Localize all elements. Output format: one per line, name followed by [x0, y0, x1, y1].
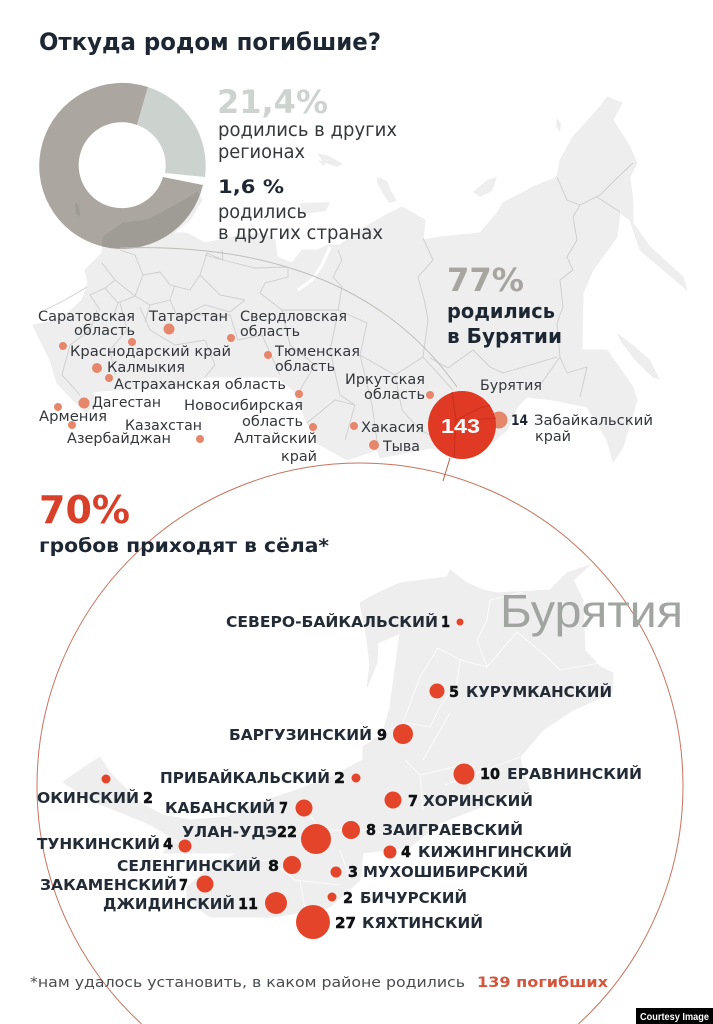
Kyakhtinsky: 27	[335, 914, 356, 932]
Bichursky: БИЧУРСКИЙ	[360, 888, 467, 907]
value 70%: 70%	[39, 488, 130, 532]
Zabaykalsky territory: Забайкальский	[534, 413, 653, 429]
Novosibirsk region: Новосибирская	[184, 398, 303, 414]
stat: 21.4% other regions	[217, 83, 397, 163]
Selenginsky: 8	[268, 857, 279, 875]
Buryatia label: Бурятия	[480, 378, 542, 394]
Kabansky: 7	[279, 799, 288, 817]
Azerbaijan: Азербайджан	[67, 431, 171, 447]
Khakassia: Хакасия	[361, 420, 424, 436]
Okinsky: 2	[143, 789, 153, 807]
Zabaykalsky territory	[490, 412, 653, 445]
credit badge	[636, 1008, 713, 1024]
Armenia: Армения	[39, 409, 107, 425]
caption other regions: регионах	[218, 142, 305, 163]
Dagestan: Дагестан	[92, 395, 161, 411]
value 143: 143	[441, 416, 480, 438]
badge background	[636, 1008, 713, 1024]
bubble circle	[428, 391, 496, 459]
Novosibirsk region	[184, 390, 303, 430]
Buryatia bubble: 143	[428, 391, 496, 459]
Dzhidinsky	[103, 892, 287, 914]
Dzhidinsky: ДЖИДИНСКИЙ	[103, 894, 235, 913]
value 21,4%: 21,4%	[217, 83, 328, 121]
Bichursky: 2	[343, 889, 353, 907]
big circle: zoomed view outline	[37, 463, 683, 1024]
Eravninsky	[454, 764, 642, 784]
Ulan-Ude	[182, 823, 331, 854]
Irkutsk region	[345, 372, 434, 403]
arc: zoom outline from Buryatia on the map	[120, 248, 457, 387]
Barguzinsky: БАРГУЗИНСКИЙ	[229, 725, 372, 744]
Kizhinginsky: 4	[401, 843, 411, 861]
value 1,6 %: 1,6 %	[218, 176, 284, 198]
Ulan-Ude: УЛАН-УДЭ	[182, 823, 277, 841]
Kazakhstan: Казахстан	[125, 418, 202, 434]
Pribaykalsky: ПРИБАЙКАЛЬСКИЙ	[160, 768, 330, 787]
Tatarstan: Татарстан	[148, 309, 228, 325]
caption other countries: в других странах	[218, 223, 383, 244]
Sverdlovsk region	[227, 309, 347, 342]
Sverdlovsk region: область	[240, 324, 300, 340]
donut chart: birthplace shares	[39, 83, 206, 249]
Tunkinsky: 4	[163, 835, 173, 853]
district markers	[37, 612, 642, 939]
Tuva: Тыва	[382, 439, 420, 455]
donut segment: born in Buryatia	[39, 83, 203, 249]
Kabansky: КАБАНСКИЙ	[165, 798, 275, 817]
Zakamensky: 7	[179, 876, 188, 894]
donut segment: other regions	[137, 87, 206, 177]
Kizhinginsky: КИЖИНГИНСКИЙ	[418, 842, 572, 861]
caption: гробов приходят в сёла*	[39, 536, 329, 557]
Kurumkansky: КУРУМКАНСКИЙ	[466, 682, 612, 701]
Selenginsky: СЕЛЕНГИНСКИЙ	[117, 856, 261, 875]
Astrakhan region: Астраханская область	[114, 377, 286, 393]
Altai territory: Алтайский	[234, 431, 317, 447]
Tatarstan	[148, 309, 228, 334]
map title: Buryatia: Бурятия	[500, 585, 683, 637]
map bay: Gulf of Ob	[298, 247, 330, 290]
Buryatia land mass	[63, 565, 613, 917]
stat: 70% coffins go to villages	[39, 488, 329, 557]
Zaigraevsky: ЗАИГРАЕВСКИЙ	[382, 820, 523, 839]
Zaigraevsky: 8	[366, 821, 376, 839]
Saratov region: Саратовская	[38, 309, 135, 325]
Zakamensky: ЗАКАМЕНСКИЙ	[40, 875, 177, 894]
Sverdlovsk region: Свердловская	[240, 309, 347, 325]
Khorinsky: ХОРИНСКИЙ	[423, 791, 533, 810]
Dzhidinsky: 11	[238, 895, 258, 913]
Eravninsky: 10	[480, 765, 500, 783]
Barguzinsky: 9	[377, 726, 387, 744]
Tyumen region	[264, 344, 360, 375]
Altai territory	[234, 423, 317, 465]
Okinsky	[37, 774, 153, 807]
Altai territory: край	[281, 449, 317, 465]
map: Russia regions	[33, 97, 687, 462]
Tyumen region: область	[275, 359, 335, 375]
Saratov region: область	[74, 323, 135, 339]
Zabaykalsky territory: 14	[511, 413, 528, 429]
Irkutsk region: область	[364, 387, 425, 403]
Tyumen region: Тюменская	[274, 344, 360, 360]
caption born in Buryatia: родились	[447, 299, 555, 323]
Mukhorshibirsky: МУХОШИБИРСКИЙ	[363, 862, 528, 881]
caption other countries: родились	[218, 202, 307, 223]
Azerbaijan	[67, 421, 171, 447]
borders inside bubble	[452, 392, 496, 458]
Khorinsky: 7	[408, 792, 418, 810]
map eastern regional borders	[418, 163, 633, 397]
footnote text: *нам удалось установить, в каком районе родились	[30, 975, 465, 991]
Eravninsky: ЕРАВНИНСКИЙ	[507, 764, 642, 783]
Kazakhstan	[125, 418, 204, 443]
footnote	[30, 975, 608, 991]
Kabansky	[165, 798, 312, 817]
footnote count: 139 погибших	[477, 975, 608, 991]
Kurumkansky: 5	[449, 683, 459, 701]
stat: 77% born in Buryatia	[447, 261, 562, 348]
caption other regions: родились в других	[218, 120, 397, 141]
heading: where the dead come from: Откуда родом погибшие?	[39, 28, 381, 56]
map islands	[75, 118, 660, 380]
value 77%: 77%	[447, 261, 524, 299]
Mukhorshibirsky: 3	[348, 863, 358, 881]
Zabaykalsky territory: край	[535, 429, 571, 445]
Novosibirsk region: область	[242, 414, 303, 430]
Barguzinsky	[229, 724, 413, 744]
Ulan-Ude: 22	[277, 823, 297, 841]
map western regional borders	[45, 250, 440, 448]
caption born in Buryatia: в Бурятии	[447, 324, 562, 348]
Kyakhtinsky: КЯХТИНСКИЙ	[362, 913, 483, 932]
Okinsky: ОКИНСКИЙ	[37, 788, 139, 807]
Tunkinsky: ТУНКИНСКИЙ	[37, 834, 160, 853]
Pribaykalsky: 2	[334, 769, 345, 787]
district borders	[150, 592, 600, 910]
Severo-Baykalsky: СЕВЕРО-БАЙКАЛЬСКИЙ	[226, 612, 438, 631]
Irkutsk region: Иркутская	[345, 372, 425, 388]
map: Buryatia districts	[63, 565, 613, 917]
map land mass	[33, 97, 687, 462]
map labels and dots: regions of birth	[38, 309, 653, 465]
Kalmykia: Калмыкия	[107, 360, 185, 376]
Khorinsky	[384, 791, 533, 810]
Krasnodar territory: Краснодарский край	[70, 344, 231, 360]
Kyakhtinsky	[296, 905, 483, 939]
connector line between bubble and big circle	[443, 458, 450, 481]
Saratov region	[38, 309, 136, 346]
stat: 1.6% other countries	[218, 176, 383, 244]
Severo-Baykalsky: 1	[441, 613, 450, 631]
